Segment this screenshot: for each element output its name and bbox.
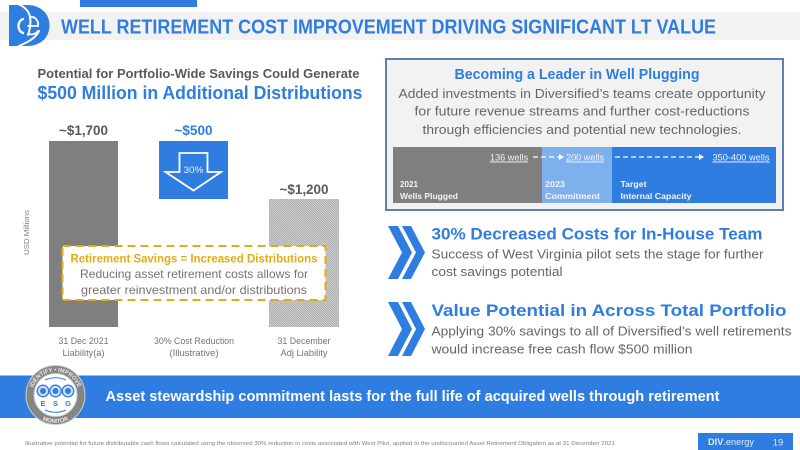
icon: company logo xyxy=(9,4,50,46)
panel text: for future revenue streams and further cost-reductions xyxy=(414,104,750,118)
icon: chevrons 1 xyxy=(388,226,425,279)
bar: cost reduction xyxy=(159,122,228,199)
text block: decreased costs xyxy=(432,224,764,279)
heading line 2: $500 Million in Additional Distributions xyxy=(38,83,362,103)
axis labels: (Illustrative) xyxy=(170,348,218,359)
axis label: USD Millions xyxy=(24,209,31,255)
well counts: 136 wells xyxy=(490,152,528,164)
icon: ESG medallion: G xyxy=(65,399,71,408)
axis labels: 31 Dec 2021 xyxy=(58,336,108,347)
text block: value potential: Applying 30% savings to all of Diversified’s well retirements xyxy=(432,324,792,338)
segment labels: Wells Plugged xyxy=(400,191,458,201)
text block: decreased costs: cost savings potential xyxy=(432,265,562,279)
bar: adjusted liability: ~$1,200 xyxy=(280,181,329,197)
icon: ESG medallion: E xyxy=(40,399,46,408)
icon: ESG medallion: S xyxy=(53,399,58,408)
axis labels: 30% Cost Reduction xyxy=(154,336,234,347)
chart heading xyxy=(38,66,362,103)
well counts: 350-400 wells xyxy=(712,152,770,164)
top accent bar xyxy=(80,0,197,7)
panel text xyxy=(398,86,766,137)
well counts xyxy=(490,152,770,164)
text block: value potential xyxy=(430,301,792,356)
segment labels xyxy=(400,179,692,201)
bar chart xyxy=(49,122,339,359)
callout: retirement savings: Retirement Savings = Increased Distributions xyxy=(70,252,318,266)
banner xyxy=(0,376,800,418)
panel: well plugging xyxy=(386,59,783,210)
segment labels: Internal Capacity xyxy=(620,191,692,201)
heading line 1: Potential for Portfolio-Wide Savings Could Generate xyxy=(38,66,360,81)
callout: retirement savings: greater reinvestment and/or distributions xyxy=(81,283,307,297)
icon: ESG medallion xyxy=(26,365,86,425)
title band xyxy=(0,12,800,40)
bar: adjusted liability xyxy=(269,181,339,327)
timeline: well capacity xyxy=(393,147,776,203)
arrow: 200 to target xyxy=(615,154,704,160)
segment labels: 2023 xyxy=(545,179,565,189)
bar: 2021 liability: ~$1,700 xyxy=(59,122,108,138)
segment labels: 2021 xyxy=(400,179,418,189)
banner: Asset stewardship commitment lasts for the full life of acquired wells through retirement xyxy=(106,389,720,405)
footer tag: DIV.energy xyxy=(708,437,754,447)
axis labels: Liability(a) xyxy=(62,348,104,359)
icon: chevrons 2 xyxy=(388,302,425,356)
panel heading: Becoming a Leader in Well Plugging xyxy=(454,67,700,83)
panel text: Added investments in Diversified’s teams create opportunity xyxy=(398,86,766,101)
bar: cost reduction: ~$500 xyxy=(174,122,213,138)
arrow: 136 to 200 xyxy=(533,154,564,160)
callout: retirement savings: Reducing asset retirement costs allows for xyxy=(80,267,308,281)
well counts: 200 wells xyxy=(566,152,604,164)
axis labels xyxy=(58,336,330,359)
text block: decreased costs: 30% Decreased Costs for In-House Team xyxy=(432,224,762,244)
axis labels: 31 December xyxy=(278,336,330,347)
text block: decreased costs: Success of West Virginia pilot sets the stage for further xyxy=(432,248,764,262)
segment labels: Target xyxy=(620,179,647,189)
bar: 2021 liability xyxy=(49,122,118,327)
footnote: Illustrative potential for future distributable cash flows calculated using the observed 30% reduction in costs associated with West Pilot, applied to the undiscounted Asset Retirement Obligation as at 31 December 2021 xyxy=(25,441,615,447)
footer tag: 19 xyxy=(773,438,783,448)
axis labels: Adj Liability xyxy=(280,348,328,359)
title: WELL RETIREMENT COST IMPROVEMENT DRIVING SIGNIFICANT LT VALUE xyxy=(61,16,716,38)
panel text: through efficiencies and potential new technologies. xyxy=(422,122,742,137)
footer tag xyxy=(698,433,793,450)
segment labels: Commitment xyxy=(545,191,600,201)
icon: down arrow xyxy=(166,153,221,190)
text block: value potential: would increase free cash flow $500 million xyxy=(430,342,693,356)
callout: retirement savings xyxy=(62,246,326,300)
icon: ESG medallion: IDENTIFY • IMPROVE xyxy=(30,368,82,388)
icon: ESG medallion: MONITOR xyxy=(42,416,68,423)
bar: cost reduction: 30% xyxy=(184,165,204,176)
text block: value potential: Value Potential in Across Total Portfolio xyxy=(432,301,786,320)
